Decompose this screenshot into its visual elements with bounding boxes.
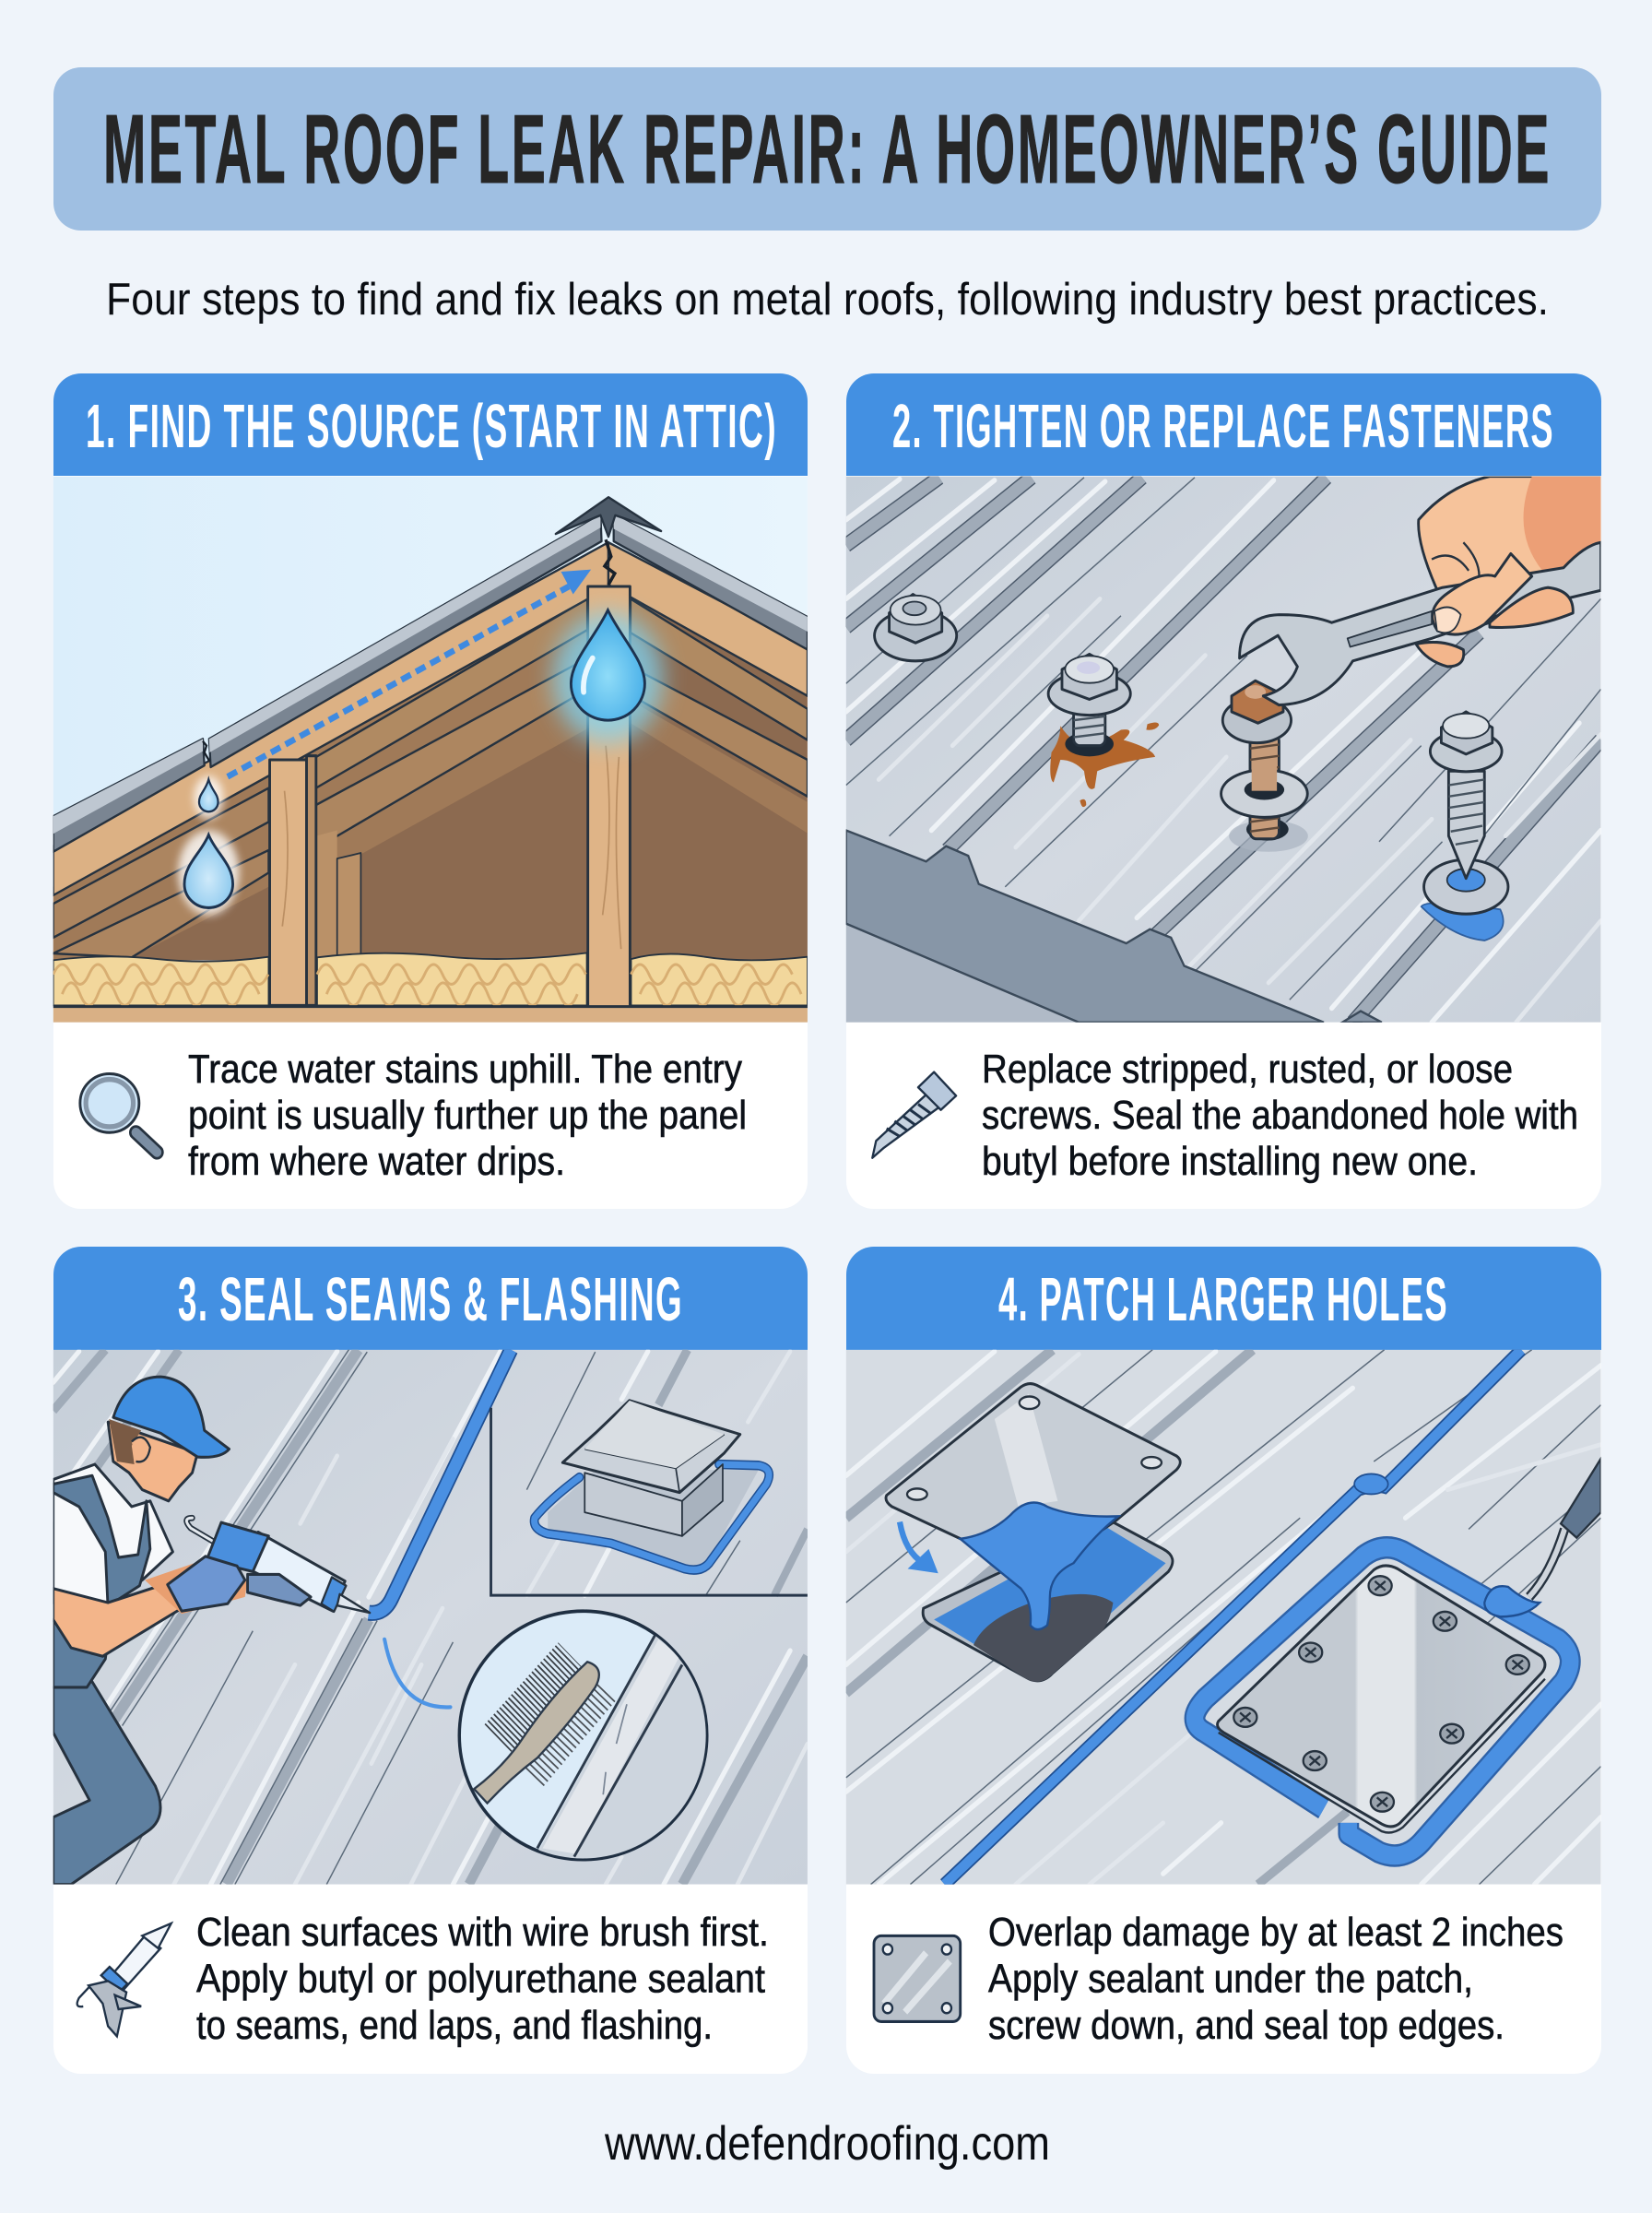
magnified circle: wire brush [459, 1611, 711, 1863]
text: step 4: Overlap damage by at least 2 inches [988, 1910, 1564, 1955]
small water drops [178, 776, 239, 915]
hole with sealant [923, 1521, 1173, 1682]
leg [53, 1682, 160, 1885]
heading: step 2 [846, 373, 1601, 476]
panel: step 4 patch holes [846, 1247, 1601, 2074]
card background [53, 373, 808, 1209]
icon: screw [872, 1072, 956, 1158]
heading: step 4 [846, 1247, 1601, 1350]
screw: rusted fastener [1048, 654, 1130, 756]
rust stain [1050, 723, 1159, 807]
fingers [1416, 542, 1573, 667]
illustration: worker sealing seam [53, 1347, 808, 1885]
large glowing water drop [552, 610, 663, 743]
text: step 1: Trace water stains uphill. The entry [188, 1047, 742, 1092]
wrench [1240, 542, 1601, 705]
caulk gun [186, 1518, 221, 1546]
rafter bands right [631, 598, 808, 740]
sealant bead [369, 1350, 511, 1613]
main rafters [53, 542, 608, 895]
panel: step 3 seal seams [53, 1247, 808, 2074]
floor beam [53, 1007, 808, 1023]
applicator tool [1484, 1459, 1601, 1616]
arm [53, 1583, 182, 1656]
text: step 3: Clean surfaces with wire brush first. [196, 1910, 769, 1955]
text: step 4: Apply sealant under the patch, [988, 1957, 1473, 2001]
text: step 4: screw down, and seal top edges. [988, 2003, 1504, 2048]
shirt [53, 1464, 172, 1608]
heading: step 3: 3. SEAL SEAMS & FLASHING [178, 1265, 683, 1334]
text: step 1 [188, 1047, 747, 1184]
text: step 1: point is usually further up the panel [188, 1093, 747, 1138]
ribs [53, 1347, 808, 1885]
text: step 2: screws. Seal the abandoned hole with [982, 1093, 1578, 1138]
text: step 3: Apply butyl or polyurethane sealant [196, 1957, 765, 2001]
screw: new fastener with sealant [1422, 712, 1508, 941]
icon: caulk gun [77, 1923, 171, 2036]
hand [1419, 477, 1601, 633]
gloves [168, 1556, 245, 1611]
sealant blob [961, 1502, 1118, 1629]
cap [113, 1377, 230, 1457]
posts [270, 760, 307, 1005]
screw: loose fastener with rust [1221, 680, 1308, 852]
text: step 1: from where water drips. [188, 1139, 565, 1184]
icon: patch plate [874, 1935, 961, 2021]
overalls bib [53, 1475, 150, 1687]
ribs [846, 478, 1601, 1023]
worker [53, 1377, 370, 1885]
loose patch plate [886, 1384, 1180, 1574]
card background [846, 1247, 1601, 2074]
gap in roof panel [203, 741, 209, 762]
insulation [53, 953, 808, 1005]
inset: vent flashing [491, 1401, 808, 1595]
text: step 4 [988, 1910, 1564, 2048]
card background [53, 1247, 808, 2074]
crack [605, 539, 615, 585]
curved arrow [900, 1521, 938, 1573]
text: step 2: butyl before installing new one. [982, 1139, 1478, 1184]
installed patch plate [1218, 1566, 1545, 1833]
illustration: roof screws and wrench [846, 477, 1601, 1023]
subtitle: Four steps to find and fix leaks on metal roofs, following industry best practices. [106, 275, 1549, 325]
text: step 2 [982, 1047, 1578, 1184]
heading: step 3 [53, 1247, 808, 1350]
head [108, 1422, 197, 1501]
ribs [846, 1350, 1601, 1885]
connector arc [384, 1639, 451, 1707]
illustration: attic cross-section [53, 477, 808, 1023]
footer website: www.defendroofing.com [604, 2117, 1050, 2171]
cut edge of panel [846, 831, 1382, 1023]
panel: step 1 find the source [53, 373, 808, 1209]
card background [846, 373, 1601, 1209]
dashed arrow [228, 570, 591, 776]
text: step 3: to seams, end laps, and flashing. [196, 2003, 713, 2048]
installed patch frame [1195, 1547, 1570, 1855]
panel: step 2 fasteners [846, 373, 1601, 1209]
rafter bands left [53, 636, 586, 961]
heading: step 1: 1. FIND THE SOURCE (START IN ATTIC) [86, 392, 777, 461]
illustration: patches on roof [846, 1350, 1601, 1885]
text: step 2: Replace stripped, rusted, or loose [982, 1047, 1513, 1092]
blue seam sealant [945, 1350, 1521, 1885]
screw: sound fastener [875, 595, 957, 661]
heading: step 1 [53, 373, 808, 476]
metal roofing [53, 739, 205, 852]
text: step 3 [196, 1910, 769, 2048]
icon: magnifying glass [80, 1073, 157, 1153]
title banner [53, 67, 1601, 231]
